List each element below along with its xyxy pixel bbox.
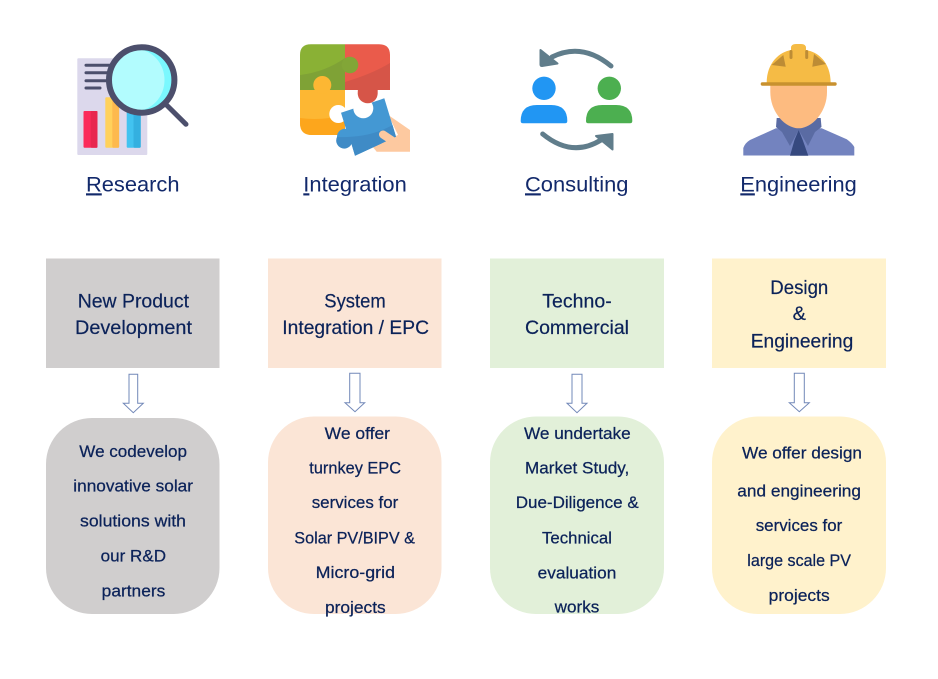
panel: consulting description: works (554, 598, 599, 617)
panel: research description: We codevelop (79, 442, 187, 461)
label: Engineering: Engineering (740, 172, 857, 196)
panel: integration description: services for (312, 493, 399, 512)
panel: New Product Development heading: New Product (78, 290, 190, 312)
panel: research description (46, 418, 220, 614)
icon: research report with magnifier (77, 47, 186, 155)
arrow: engineering down (789, 373, 809, 412)
panel: Techno-Commercial heading (490, 258, 664, 368)
panel: integration description (268, 416, 442, 617)
panel: consulting description (490, 416, 664, 617)
panel: Design & Engineering heading: Design (770, 277, 828, 299)
panel: System Integration / EPC heading (268, 258, 442, 368)
icon: two people exchanging (521, 50, 632, 150)
panel: New Product Development heading (46, 258, 220, 368)
panel: integration description: We offer (325, 424, 390, 443)
panel: engineering description (712, 416, 886, 614)
panel: Design & Engineering heading (712, 258, 886, 368)
panel: engineering description: We offer design (742, 443, 862, 462)
panel: integration description: turnkey EPC (309, 458, 401, 477)
panel: consulting description: Market Study, (525, 458, 629, 477)
label: Consulting: Consulting (525, 172, 628, 196)
panel: research description: solutions with (80, 512, 186, 531)
panel: consulting description: Due-Diligence & (516, 493, 639, 512)
panel: Techno-Commercial heading: Commercial (525, 317, 629, 339)
panel: integration description: Micro-grid (316, 563, 395, 582)
panel: consulting description: Technical (542, 528, 612, 547)
panel: research description: partners (102, 582, 165, 601)
panel: System Integration / EPC heading: Integration / EPC (282, 317, 429, 339)
icon: puzzle pieces and hand (300, 44, 410, 156)
panel: integration description: projects (325, 598, 386, 617)
panel: engineering description: and engineering (737, 482, 861, 501)
panel: System Integration / EPC heading: System (324, 290, 386, 312)
panel: Design & Engineering heading: & (793, 303, 806, 325)
arrow: research down (123, 374, 143, 413)
panel: Design & Engineering heading: Engineering (751, 330, 853, 352)
panel: research description: innovative solar (73, 477, 193, 496)
panel: research description: our R&D (101, 547, 166, 566)
arrow: consulting down (567, 374, 587, 413)
panel: integration description: Solar PV/BIPV & (294, 528, 416, 547)
panel: Techno-Commercial heading: Techno- (542, 290, 612, 312)
panel: engineering description: large scale PV (747, 551, 852, 570)
label: Integration: Integration (303, 172, 407, 196)
panel: consulting description: evaluation (538, 563, 616, 582)
panel: engineering description: projects (769, 586, 830, 605)
panel: engineering description: services for (756, 516, 843, 535)
arrow: integration down (345, 373, 365, 412)
icon: engineer with hard hat (743, 44, 854, 156)
panel: New Product Development heading: Development (75, 317, 193, 339)
panel: consulting description: We undertake (524, 424, 631, 443)
label: Research: Research (86, 172, 180, 196)
